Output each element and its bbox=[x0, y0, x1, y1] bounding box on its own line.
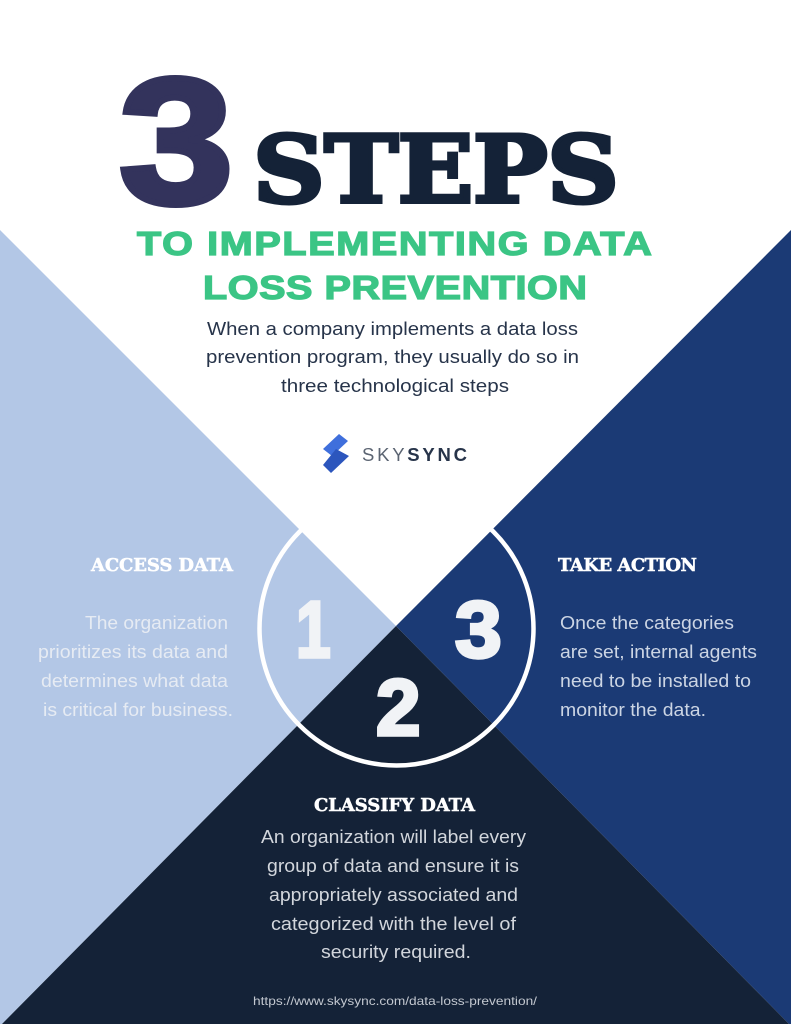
logo: SkySync bbox=[323, 434, 467, 473]
body: access data: prioritizes its data and bbox=[38, 642, 228, 662]
step 1: access data bbox=[38, 555, 234, 720]
body: classify data: An organization will label every bbox=[261, 827, 526, 847]
subtitle: to implementing data loss prevention: TO IMPLEMENTING DATA bbox=[137, 225, 652, 262]
body: access data bbox=[38, 613, 233, 720]
panel: classify data triangle bbox=[0, 626, 791, 1024]
step 2: classify data bbox=[261, 795, 526, 962]
body: access data: is critical for business. bbox=[43, 700, 233, 720]
heading: classify data: CLASSIFY DATA bbox=[314, 795, 476, 816]
panel: access data triangle bbox=[0, 230, 396, 1024]
subtitle: to implementing data loss prevention: LOSS PREVENTION bbox=[203, 269, 587, 306]
step 3: take action bbox=[558, 555, 757, 720]
title: big numeral 3: 3 bbox=[119, 41, 233, 241]
intro text: three technological steps bbox=[281, 376, 509, 396]
heading: take action: TAKE ACTION bbox=[558, 555, 697, 576]
body: classify data: security required. bbox=[321, 942, 471, 962]
body: take action: Once the categories bbox=[560, 613, 734, 633]
body: classify data: group of data and ensure it is bbox=[267, 856, 519, 876]
body: access data: The organization bbox=[85, 613, 228, 633]
step number 3: 3 bbox=[455, 586, 502, 675]
body: take action: need to be installed to bbox=[560, 671, 751, 691]
body: classify data: appropriately associated and bbox=[269, 885, 518, 905]
logo wordmark: SKYSYNC bbox=[362, 444, 467, 465]
panel: take action triangle bbox=[396, 230, 791, 1024]
body: take action bbox=[560, 613, 757, 720]
step number 1: 1 bbox=[296, 586, 331, 675]
icon: SkySync mark bbox=[323, 434, 349, 473]
source url: https://www.skysync.com/data-loss-prevention/ bbox=[253, 994, 538, 1008]
body: take action: are set, internal agents bbox=[560, 642, 757, 662]
body: classify data bbox=[261, 827, 526, 962]
title: STEPS: STEPS bbox=[253, 115, 619, 224]
step number 2: 2 bbox=[376, 663, 420, 752]
body: classify data: categorized with the level of bbox=[271, 914, 517, 934]
intro text: prevention program, they usually do so in bbox=[206, 347, 579, 367]
body: access data: determines what data bbox=[41, 671, 229, 691]
subtitle: to implementing data loss prevention bbox=[137, 225, 652, 306]
body: take action: monitor the data. bbox=[560, 700, 706, 720]
step circle outline bbox=[260, 492, 534, 766]
intro text bbox=[206, 319, 579, 396]
intro text: When a company implements a data loss bbox=[207, 319, 578, 339]
heading: access data: ACCESS DATA bbox=[90, 555, 234, 576]
